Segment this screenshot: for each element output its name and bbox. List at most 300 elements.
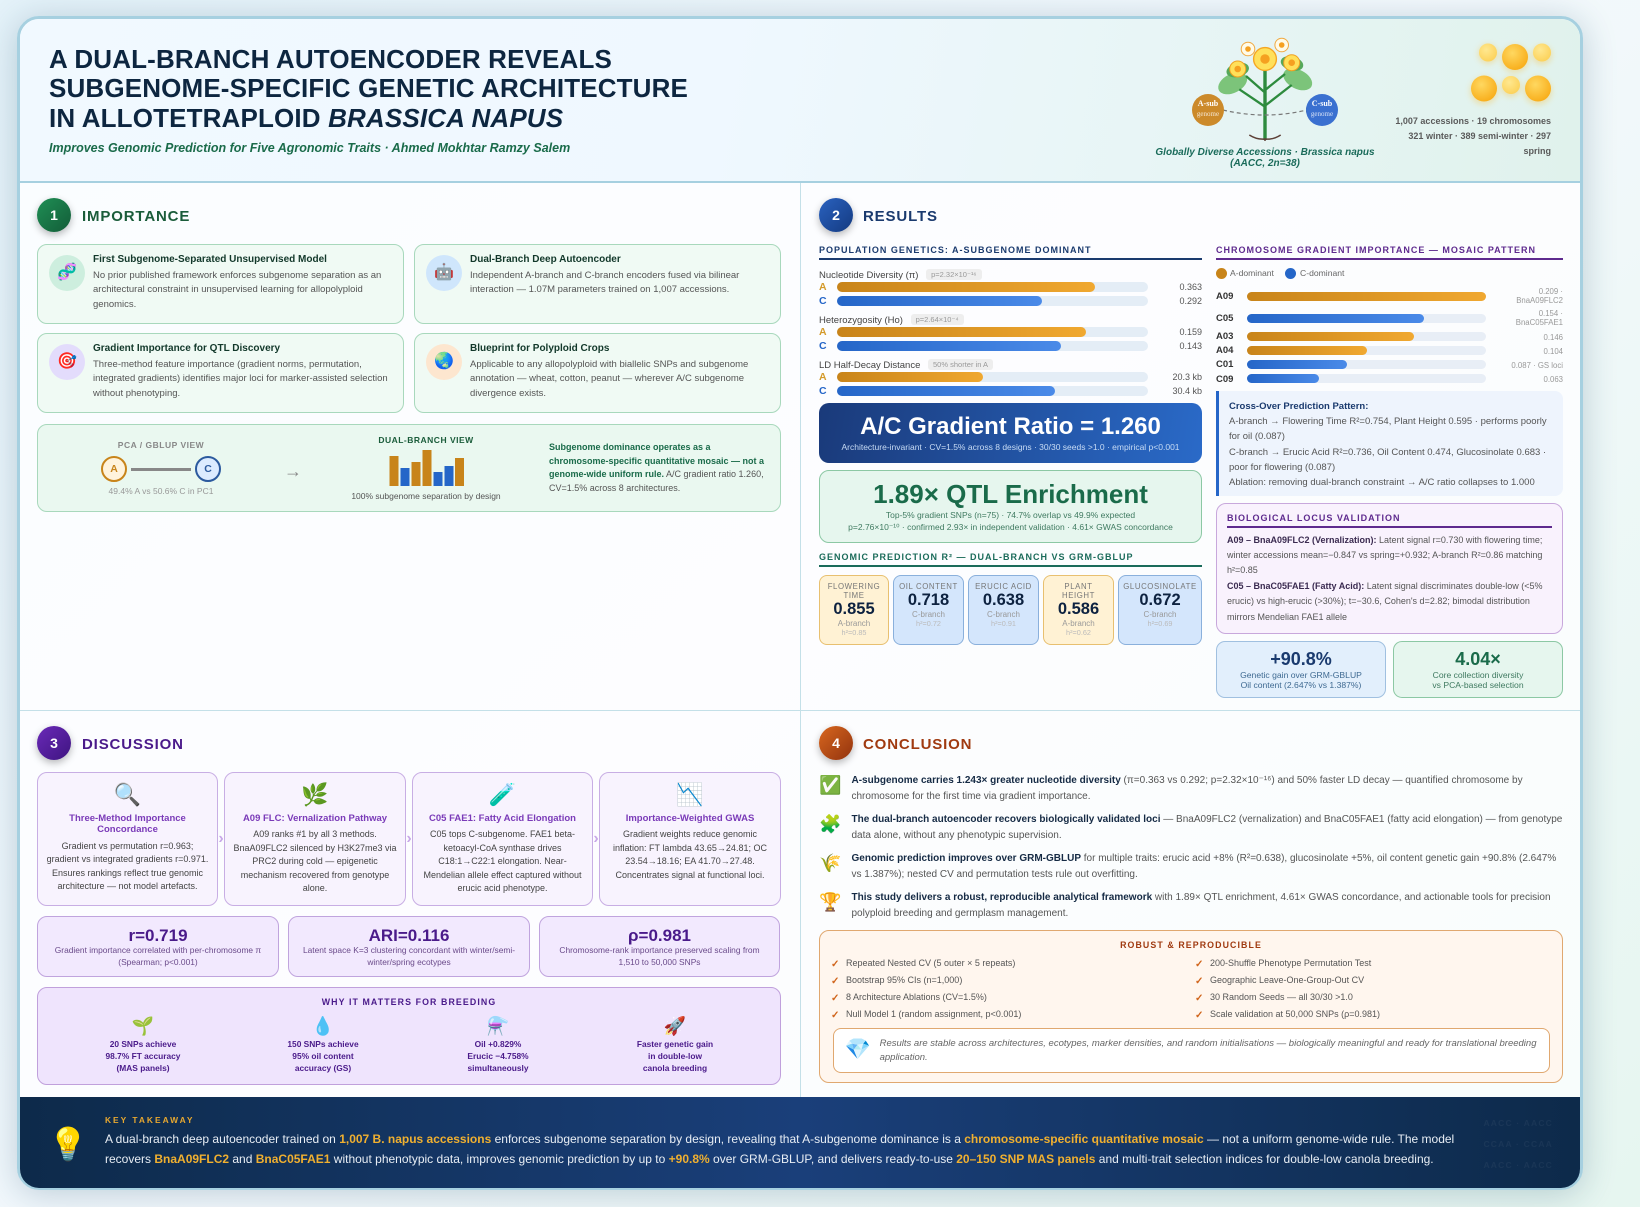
metric label: Nucleotide Diversity (π) — [819, 270, 918, 280]
stat: core collection: vs PCA-based selection — [1432, 680, 1524, 690]
benefit: mas panels: 20 SNPs achieve — [110, 1039, 176, 1049]
card text: No prior published framework enforces subgenome separation as an — [93, 270, 381, 280]
card text: without phenotyping. — [93, 388, 180, 399]
card text: Ensures rankings reflect true genomic — [52, 868, 203, 878]
benefit: mas panels: 🌱 — [132, 1016, 154, 1036]
title: A DUAL-BRANCH AUTOENCODER REVEALS — [49, 44, 612, 74]
card text: Gradient weights reduce genomic — [623, 829, 757, 839]
trait: oil content: 0.718 — [908, 591, 949, 609]
conclusion item 3: Genomic prediction improves over GRM-GBLUP for multiple traits: erucic acid +8% (R²=0.638), glucosinolate +5%, oil content genetic gain +90.8% (2.647% — [852, 853, 1556, 864]
trait: erucic acid — [968, 575, 1039, 645]
divider: vertical — [800, 183, 801, 1097]
chart: chromosome importance bars: A09 — [1216, 291, 1233, 302]
conclusion item 1: chromosome for the first time via gradient importance. — [852, 791, 1090, 802]
card text: Three-method feature importance (gradient norms, permutation, — [93, 358, 362, 370]
trait: glucosinolate: h²=0.69 — [1148, 619, 1172, 628]
benefit: selection: simultaneously — [468, 1063, 528, 1073]
callout: qtl enrichment: 1.89× QTL Enrichment — [873, 479, 1148, 509]
conclusion item 4: polyploid breeding and germplasm management. — [852, 908, 1068, 919]
conclusion item 4: 🏆 — [819, 892, 842, 912]
callout: cross-over pattern: Ablation: removing dual-branch constraint → A/C ratio collapses to 1.000 — [1229, 477, 1535, 488]
card title: Blueprint for Polyploid Crops — [470, 343, 609, 354]
comparison banner — [37, 424, 781, 512]
subheading: genomic prediction — [819, 550, 1202, 567]
checklist left: Null Model 1 (random assignment, p<0.001) — [846, 1009, 1021, 1019]
stat: rho — [539, 916, 780, 977]
stat: ari — [288, 916, 530, 977]
bar A — [819, 371, 1202, 383]
heading: WHY IT MATTERS FOR BREEDING — [322, 997, 496, 1007]
card text: C05 tops C-subgenome. FAE1 beta- — [430, 829, 575, 839]
card: three-method — [37, 772, 218, 906]
icon: chart: 📉 — [676, 782, 704, 807]
card title: Dual-Branch Deep Autoencoder — [470, 254, 621, 265]
footer: key takeaway — [20, 1097, 1580, 1188]
conclusion item 4 — [819, 890, 1563, 922]
panel: robust and reproducible — [819, 930, 1563, 1083]
card text: erucic acid phenotype. — [457, 883, 548, 893]
checklist left: ✓ — [831, 976, 839, 986]
card: blueprint — [414, 333, 781, 413]
stat: core collection: 4.04× — [1455, 649, 1501, 669]
chart: chromosome importance bars: 0.063 — [1543, 375, 1563, 384]
heading: results: RESULTS — [863, 208, 938, 225]
metric label: LD Half-Decay Distance — [819, 360, 920, 370]
bar C — [819, 295, 1202, 307]
icon: robot: 🤖 — [434, 264, 454, 281]
benefit: genetic gain: canola breeding — [643, 1063, 707, 1073]
chart: chromosome importance bars: BnaA09FLC2 — [1516, 296, 1563, 304]
card: weighted gwas — [599, 772, 781, 906]
metric: nucleotide diversity — [819, 269, 1202, 307]
metric label: p=2.32×10⁻¹⁶ — [931, 270, 977, 278]
benefit: gs: 95% oil content — [292, 1051, 354, 1061]
icon: test tube: 🧪 — [489, 782, 516, 807]
stability note — [833, 1028, 1550, 1073]
validation text: C05 – BnaC05FAE1 (Fatty Acid): Latent signal discriminates double-low (<5% — [1227, 581, 1543, 591]
trait: erucic acid: ERUCIC ACID — [975, 582, 1032, 591]
heading: conclusion: CONCLUSION — [863, 736, 972, 753]
bar A: A — [819, 326, 827, 338]
checklist right: ✓ — [1195, 958, 1203, 970]
conclusion item 3 — [819, 851, 1563, 883]
conclusion item 2: 🧩 — [819, 814, 842, 834]
metric label: 50% shorter in A — [933, 360, 988, 368]
card text: architecture — not model artefacts. — [57, 881, 198, 891]
benefit: selection: ⚗️ — [487, 1016, 509, 1036]
chart: chromosome importance bars: A04 — [1216, 345, 1233, 356]
conclusion item 1: ✅ — [819, 775, 842, 795]
watermark: AACC · AACC — [1483, 1118, 1553, 1128]
card text: Independent A-branch and C-branch encoders fused via bilinear — [470, 270, 739, 280]
stat: rho: ρ=0.981 — [628, 926, 691, 944]
card text: PRC2 during cold — epigenetic — [252, 856, 378, 866]
card: a09 flc — [224, 772, 406, 906]
icon: light bulb: 💡 — [48, 1126, 88, 1162]
card text — [613, 829, 767, 880]
section badge 2: 2 — [832, 207, 840, 223]
icon: plant with subgenomes: A-sub — [1198, 99, 1219, 108]
card text: 23.54→18.16; EA 41.70→27.48. — [625, 856, 755, 866]
benefit: gs: 💧 — [312, 1016, 334, 1036]
stat: r: Gradient importance correlated with per-chromosome π — [55, 945, 261, 955]
chevron: › — [593, 830, 599, 847]
card text: Concentrates signal at functional loci. — [615, 870, 765, 880]
note text: application. — [880, 1052, 928, 1063]
conclusion item 2: data alone, without any phenotypic supervision. — [852, 830, 1062, 841]
checklist right: Geographic Leave-One-Group-Out CV — [1210, 975, 1364, 985]
benefit: gs: accuracy (GS) — [295, 1063, 351, 1073]
card: c05 fae1 — [412, 772, 593, 906]
checklist right: Scale validation at 50,000 SNPs (ρ=0.981) — [1210, 1009, 1380, 1019]
trait: plant height: HEIGHT — [1062, 591, 1095, 600]
mini bar chart — [390, 450, 464, 486]
checklist right — [1195, 956, 1535, 1024]
title — [49, 44, 688, 132]
plant caption: Globally Diverse Accessions · Brassica napus — [1155, 147, 1375, 158]
trait: glucosinolate — [1118, 575, 1202, 645]
callout: cross-over pattern: Cross-Over Prediction Pattern: — [1229, 401, 1368, 412]
banner note: chromosome-specific quantitative mosaic — not a — [549, 456, 764, 466]
checklist right: 200-Shuffle Phenotype Permutation Test — [1210, 958, 1371, 968]
card text — [233, 829, 397, 893]
checklist right: ✓ — [1195, 992, 1203, 1004]
panel: discussion — [33, 725, 781, 1085]
plant caption: (AACC, 2n=38) — [1230, 158, 1300, 169]
trait: flowering time: h²=0.85 — [842, 628, 866, 637]
stat: rho: 1,510 to 50,000 SNPs — [619, 957, 700, 967]
card text: integrated gradients) identifies major loci for marker-assisted selection — [93, 373, 388, 384]
banner note: Subgenome dominance operates as a — [549, 442, 711, 452]
benefit: mas panels — [106, 1016, 180, 1073]
benefit: genetic gain: Faster genetic gain — [637, 1039, 713, 1049]
header — [20, 19, 1580, 183]
callout: cross-over pattern: poor for flowering (0.087) — [1229, 462, 1335, 473]
note text — [880, 1037, 1536, 1065]
caption: pca: 49.4% A vs 50.6% C in PC1 — [109, 486, 213, 496]
bar A — [819, 281, 1202, 293]
accession stats: 321 winter · 389 semi-winter · 297 — [1408, 130, 1551, 140]
heading: discussion: DISCUSSION — [82, 736, 184, 753]
bar A: 0.159 — [1179, 327, 1202, 337]
benefit: selection — [467, 1016, 529, 1073]
panel: importance — [33, 197, 781, 512]
chart: chromosome importance bars — [1216, 286, 1563, 384]
trait: oil content: h²=0.72 — [916, 619, 941, 628]
diagram: A vs C: A — [110, 463, 118, 475]
trait: erucic acid: h²=0.91 — [991, 619, 1016, 628]
conclusion item 2 — [819, 812, 1563, 844]
stat: ari: Latent space K=3 clustering concordant with winter/semi- — [303, 945, 515, 955]
trait: glucosinolate: 0.672 — [1139, 591, 1181, 609]
card title: First Subgenome-Separated Unsupervised Model — [93, 254, 327, 265]
watermark — [1483, 1113, 1553, 1176]
watermark: AACC · AACC — [1483, 1160, 1553, 1170]
chart: chromosome importance bars: 0.104 — [1543, 346, 1563, 356]
callout: gradient ratio: A/C Gradient Ratio = 1.260 — [860, 413, 1161, 440]
card text — [424, 829, 582, 893]
bar C — [819, 340, 1202, 352]
card text: A09 ranks #1 by all 3 methods. — [253, 829, 377, 839]
bar A: A — [819, 281, 827, 293]
subheading: chromosome importance — [1216, 243, 1563, 260]
accession stats: spring — [1523, 146, 1551, 156]
checklist left: Repeated Nested CV (5 outer × 5 repeats) — [846, 958, 1015, 968]
trait: erucic acid: 0.638 — [983, 591, 1024, 609]
label: pca view: PCA / GBLUP VIEW — [118, 440, 204, 450]
chart: chromosome importance bars: BnaC05FAE1 — [1516, 318, 1563, 326]
banner note: CV=1.5% across 8 architectures. — [549, 483, 680, 493]
takeaway text: recovers BnaA09FLC2 and BnaC05FAE1 without phenotypic data, improves genomic prediction by up to +90.8% over GRM-GBLUP, and delivers ready-to-use 20–150 SNP MAS panels and multi-trait selection indices for double-low canola breeding. — [105, 1152, 1434, 1166]
card text: Mendelian allele effect captured without — [424, 870, 581, 880]
banner note: genome-wide uniform rule. A/C gradient ratio 1.260, — [549, 469, 764, 479]
divider: horizontal — [20, 710, 1580, 711]
metric label — [819, 314, 964, 326]
stat: r: (Spearman; p<0.001) — [118, 957, 198, 967]
section badge 3 — [37, 726, 71, 760]
section badge 3: 3 — [50, 735, 58, 751]
trait: flowering time: FLOWERING — [828, 582, 880, 591]
icon: herb: 🌿 — [301, 782, 329, 807]
stat: ari: winter/spring ecotypes — [367, 957, 451, 967]
stat: genetic gain: Genetic gain over GRM-GBLUP — [1240, 670, 1362, 680]
card text: divergence exists. — [470, 388, 546, 399]
subheading — [1227, 511, 1552, 528]
arrow: → — [284, 461, 302, 481]
icon: plant with subgenomes: genome — [1197, 110, 1219, 118]
icon: dna — [49, 255, 85, 291]
card text — [93, 358, 388, 399]
takeaway text: A dual-branch deep autoencoder trained on 1,007 B. napus accessions enforces subgenome separation by design, revealing that A-subgenome dominance is a chromosome-specific quantitative mosaic — not a uniform genome-wide rule. The model — [105, 1132, 1454, 1146]
trait: oil content — [893, 575, 964, 645]
card text — [470, 358, 748, 399]
checklist left: ✓ — [831, 958, 839, 970]
validation text: erucic) vs high-erucic (>30%); t=−30.6, Cohen's d=2.82; bimodal distribution — [1227, 596, 1530, 606]
benefit: selection: Oil +0.829% — [475, 1039, 521, 1049]
subheading: genomic prediction: GENOMIC PREDICTION R² — DUAL-BRANCH VS GRM-GBLUP — [819, 552, 1134, 562]
card text: BnaA09FLC2 silenced by H3K27me3 via — [233, 843, 397, 853]
diagram: A vs C: C — [204, 463, 212, 475]
callout: qtl enrichment: Top-5% gradient SNPs (n=75) · 74.7% overlap vs 49.9% expected — [886, 510, 1135, 520]
checklist right: 30 Random Seeds — all 30/30 >1.0 — [1210, 992, 1353, 1002]
checklist left: Bootstrap 95% CIs (n=1,000) — [846, 975, 962, 985]
validation text: h²=0.85 — [1227, 565, 1258, 575]
trait: oil content: C-branch — [912, 610, 945, 618]
card text: gradient vs integrated gradients r=0.971. — [47, 854, 208, 864]
accession stats: 1,007 accessions · 19 chromosomes — [1395, 116, 1551, 126]
accession stats — [1395, 116, 1551, 156]
card: dual-branch — [414, 244, 781, 324]
chart: chromosome importance bars: C01 — [1216, 359, 1233, 370]
bar C: C — [819, 385, 827, 397]
benefit: mas panels: 98.7% FT accuracy — [106, 1051, 180, 1061]
bar C — [819, 385, 1202, 397]
conclusion item 4: This study delivers a robust, reproducible analytical framework with 1.89× QTL enrichment, 4.61× GWAS concordance, and actionable tools for precision — [852, 892, 1551, 903]
chart: chromosome importance bars: 0.087 · GS loci — [1511, 360, 1563, 370]
trait: oil content: OIL CONTENT — [899, 582, 958, 591]
stat: genetic gain: +90.8% — [1270, 649, 1332, 669]
legend: C-dominant — [1300, 268, 1344, 278]
checklist right: ✓ — [1195, 976, 1203, 986]
checklist left: 8 Architecture Ablations (CV=1.5%) — [846, 992, 987, 1002]
panel: results — [815, 197, 1563, 698]
chart: chromosome importance bars: A03 — [1216, 331, 1233, 342]
trait: plant height: PLANT — [1064, 582, 1093, 591]
benefit: genetic gain — [637, 1016, 713, 1073]
card text — [93, 270, 381, 310]
subheading: BIOLOGICAL LOCUS VALIDATION — [1227, 513, 1400, 523]
chart: chromosome importance bars: 0.146 — [1543, 332, 1563, 342]
stat: r: r=0.719 — [128, 926, 188, 944]
conclusion item 3: 🌾 — [819, 853, 842, 873]
note text: Results are stable across architectures, ecotypes, marker densities, and random initialisations — biologically meaningful and ready for translational breeding — [880, 1038, 1536, 1049]
metric label — [819, 359, 993, 370]
panel: why it matters — [37, 987, 781, 1085]
chart: chromosome importance bars: 0.209 · — [1539, 286, 1563, 296]
subheading: chromosome importance: CHROMOSOME GRADIENT IMPORTANCE — MOSAIC PATTERN — [1216, 245, 1536, 255]
validation text — [1227, 534, 1543, 622]
callout: cross-over pattern: C-branch → Erucic Acid R²=0.736, Oil Content 0.474, Glucosinolate 0.683 · — [1229, 447, 1546, 458]
card text: inflation: FT lambda 43.65→24.81; OC — [613, 843, 767, 853]
trait: flowering time: 0.855 — [833, 600, 875, 618]
section badge 4 — [819, 726, 853, 760]
chart: chromosome importance bars: C09 — [1216, 374, 1233, 384]
trait: glucosinolate: GLUCOSINOLATE — [1123, 582, 1197, 591]
icon: magnifier: 🔍 — [114, 782, 141, 807]
icon: target — [49, 344, 85, 380]
validation text: winter accessions mean=−0.847 vs spring=+0.932; A-branch R²=0.86 matching — [1227, 550, 1542, 560]
trait: plant height — [1043, 575, 1114, 645]
title: SUBGENOME-SPECIFIC GENETIC ARCHITECTURE — [49, 73, 688, 103]
legend — [1216, 268, 1344, 279]
bar C: 30.4 kb — [1172, 386, 1202, 396]
callout: cross-over pattern: for oil (0.087) — [1229, 431, 1285, 442]
plant caption — [1155, 147, 1375, 169]
card text: Gradient vs permutation r=0.963; — [62, 840, 193, 850]
card title: A09 FLC: Vernalization Pathway — [243, 813, 387, 824]
subheading: population genetics — [819, 243, 1202, 260]
card title: Importance-Weighted GWAS — [626, 813, 754, 824]
section badge 2 — [819, 198, 853, 232]
conclusion item 3: vs 1.387%); nested CV and permutation tests rule out overfitting. — [852, 869, 1138, 880]
metric label — [819, 269, 982, 280]
bar C: C — [819, 295, 827, 307]
icon: gem: 💎 — [845, 1038, 871, 1061]
metric: ld decay — [819, 359, 1202, 397]
icon: robot — [426, 255, 462, 291]
watermark: CCAA · CCAA — [1483, 1139, 1553, 1149]
icon: globe — [426, 344, 462, 380]
validation text: A09 – BnaA09FLC2 (Vernalization): Latent signal r=0.730 with flowering time; — [1227, 534, 1542, 544]
takeaway text — [105, 1129, 1454, 1169]
card text: genomics. — [93, 299, 136, 310]
conclusion item 1 — [819, 773, 1563, 805]
card title — [69, 813, 186, 835]
metric label: Heterozygosity (Ho) — [819, 314, 903, 326]
bar C: 0.292 — [1179, 296, 1202, 306]
card title: Three-Method Importance — [69, 813, 186, 824]
icon: globe: 🌏 — [434, 353, 454, 370]
trait: plant height: A-branch — [1062, 618, 1095, 628]
card text — [47, 840, 208, 891]
subtitle: Improves Genomic Prediction for Five Agronomic Traits · Ahmed Mokhtar Ramzy Salem — [49, 141, 570, 155]
heading: importance: IMPORTANCE — [82, 208, 190, 225]
card title: Gradient Importance for QTL Discovery — [93, 343, 280, 354]
icon: plant with subgenomes: genome — [1311, 110, 1333, 118]
stat: r — [37, 916, 279, 977]
callout: cross-over pattern: A-branch → Flowering Time R²=0.754, Plant Height 0.595 · performs poorly — [1229, 416, 1547, 427]
icon: plant with subgenomes: C-sub — [1312, 99, 1333, 108]
metric label: p=2.64×10⁻⁴ — [916, 314, 959, 324]
trait: plant height: h²=0.62 — [1066, 628, 1091, 637]
subheading: population genetics: POPULATION GENETICS: A-SUBGENOME DOMINANT — [819, 245, 1092, 255]
panel: biological locus validation — [1216, 503, 1563, 634]
checklist left: ✓ — [831, 1010, 839, 1020]
chevron: › — [406, 830, 412, 847]
section badge 1: 1 — [50, 207, 58, 223]
conclusion item 2: The dual-branch autoencoder recovers biologically validated loci — BnaA09FLC2 (vernalization) and BnaC05FAE1 (fatty acid elongation) — from genotype — [852, 814, 1562, 825]
callout: cross-over pattern — [1216, 391, 1563, 496]
card text: interaction — 1.07M parameters trained on 1,007 accessions. — [470, 284, 729, 295]
section badge 4: 4 — [832, 735, 840, 751]
icon: plant with subgenomes — [1192, 38, 1338, 141]
card title: C05 FAE1: Fatty Acid Elongation — [429, 813, 576, 824]
benefit: selection: Erucic −4.758% — [467, 1051, 529, 1061]
panel: conclusion — [815, 725, 1563, 1083]
benefit: genetic gain: in double-low — [648, 1051, 702, 1061]
title: IN ALLOTETRAPLOID BRASSICA NAPUS — [49, 102, 563, 132]
card: gradient importance — [37, 333, 404, 413]
icon: seed spheres — [1467, 41, 1554, 108]
trait: glucosinolate: C-branch — [1144, 610, 1176, 618]
stat: genetic gain — [1216, 641, 1386, 698]
benefit: gs — [287, 1016, 359, 1073]
bar C: 0.143 — [1179, 341, 1202, 351]
chevron: › — [218, 830, 224, 847]
conclusion item 1: A-subgenome carries 1.243× greater nucleotide diversity (π=0.363 vs 0.292; p=2.32×10⁻¹⁶) and 50% faster LD decay — quantified chromosome by — [852, 775, 1523, 786]
chart: chromosome importance bars: 0.154 · — [1539, 308, 1563, 318]
stat: core collection: Core collection diversity — [1433, 670, 1523, 680]
label: KEY TAKEAWAY — [105, 1115, 194, 1125]
trait: erucic acid: C-branch — [987, 610, 1020, 618]
card text: ketoacyl-CoA synthase drives — [443, 843, 562, 853]
callout: qtl enrichment — [819, 470, 1202, 543]
bar C: C — [819, 340, 827, 352]
bar A: 0.363 — [1179, 282, 1202, 292]
icon: dna: 🧬 — [57, 264, 77, 281]
trait: flowering time: TIME — [843, 591, 865, 600]
icon: target: 🎯 — [57, 353, 77, 370]
card text — [470, 270, 740, 295]
bar A — [819, 326, 1202, 338]
card text: annotation — wheat, cotton, peanut — wherever A/C subgenome — [470, 373, 744, 384]
card text: C18:1→C22:1 elongation. Near- — [438, 856, 567, 866]
trait: plant height: 0.586 — [1058, 600, 1099, 618]
stat: genetic gain: Oil content (2.647% vs 1.387%) — [1241, 680, 1361, 690]
metric: heterozygosity — [819, 314, 1202, 352]
chart: chromosome importance bars: C05 — [1216, 313, 1233, 324]
heading: ROBUST & REPRODUCIBLE — [1120, 940, 1262, 950]
checklist right: ✓ — [1195, 1010, 1203, 1020]
banner note — [549, 442, 764, 493]
callout: gradient ratio: Architecture-invariant · CV=1.5% across 8 designs · 30/30 seeds >1.0 · empirical p<0.001 — [841, 442, 1180, 452]
bar A: 20.3 kb — [1172, 372, 1202, 382]
card text: alone. — [303, 883, 327, 893]
stat: core collection — [1393, 641, 1563, 698]
benefit: mas panels: (MAS panels) — [116, 1063, 170, 1073]
card text: mechanism recovered from genotype — [241, 870, 389, 880]
benefit: genetic gain: 🚀 — [664, 1016, 686, 1036]
